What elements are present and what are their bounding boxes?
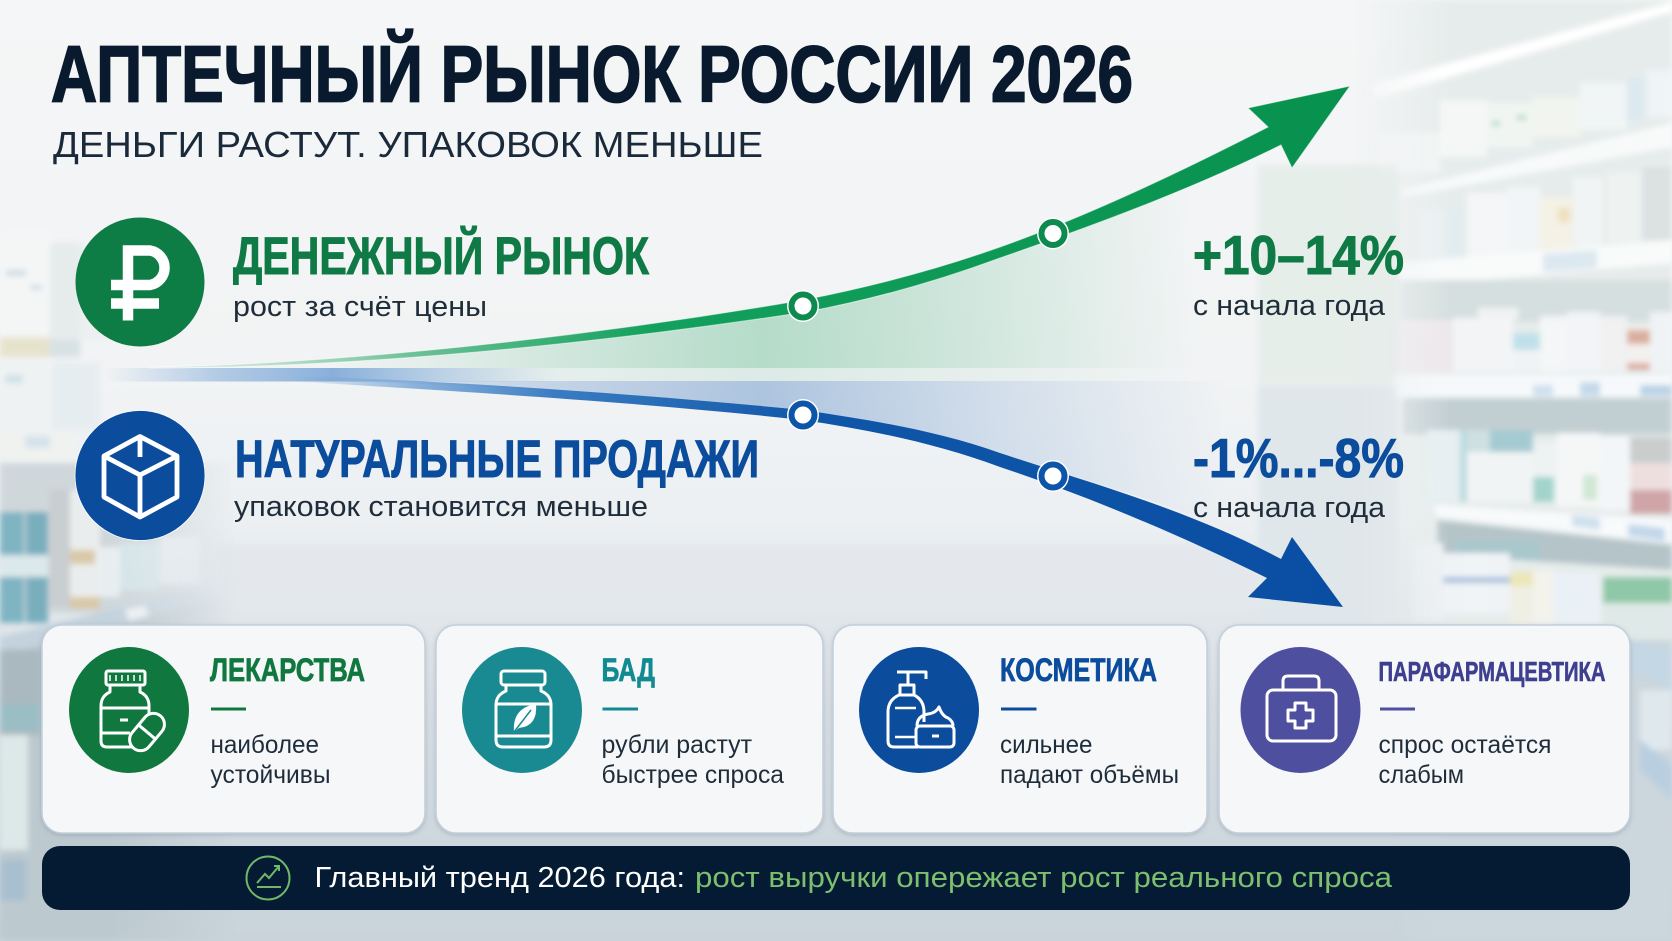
trend text: Главный тренд 2026 года:: [314, 862, 685, 894]
card text: падают объёмы: [1000, 761, 1179, 789]
heading: unit sales: НАТУРАЛЬНЫЕ ПРОДАЖИ: [235, 430, 759, 489]
icon: first aid case: [1240, 647, 1360, 773]
icon: rising chart: [246, 856, 290, 900]
title: АПТЕЧНЫЙ РЫНОК РОССИИ 2026: [51, 28, 1133, 118]
panel: parapharmaceuticals: [1219, 625, 1630, 833]
panel: dietary supplements: [436, 625, 823, 833]
card title: КОСМЕТИКА: [1000, 652, 1157, 688]
icon: box: [75, 410, 205, 540]
stat: money growth: +10–14%: [1193, 224, 1404, 286]
icon: pump bottle and cream jar: [859, 647, 979, 773]
icon: supplement jar with leaf: [462, 647, 582, 773]
blue area above decline curve: [300, 381, 1225, 531]
stat note: money growth: с начала года: [1193, 290, 1386, 322]
decline marker 2: [1037, 460, 1069, 492]
chart: diverging revenue and volume arrows: [105, 86, 1350, 607]
pale band at curve origin: [105, 368, 560, 382]
growth marker 2: [1037, 218, 1069, 250]
blue arrow: unit sales: [290, 376, 1343, 607]
callout: main trend bar: [42, 846, 1630, 910]
icon: medicine bottle and pill: [69, 647, 189, 773]
card text: сильнее: [1000, 731, 1092, 759]
subtitle: ДЕНЬГИ РАСТУТ. УПАКОВОК МЕНЬШЕ: [53, 124, 763, 165]
card text: наиболее: [210, 731, 319, 759]
card title: ЛЕКАРСТВА: [210, 652, 365, 688]
card text: быстрее спроса: [602, 761, 784, 789]
heading: money market: ДЕНЕЖНЫЙ РЫНОК: [233, 227, 650, 286]
card text: рубли растут: [602, 731, 753, 759]
stat note: unit decline: с начала года: [1193, 492, 1386, 524]
card text: спрос остаётся: [1378, 731, 1552, 759]
pale band between areas: [330, 368, 1195, 381]
icon: ruble: [76, 218, 204, 346]
growth marker 1: [787, 290, 819, 322]
decline marker 1: [787, 399, 819, 431]
green area under growth curve: [330, 165, 1195, 368]
panel: medicines: [42, 625, 425, 833]
card text: слабым: [1378, 761, 1464, 789]
trend text: рост выручки опережает рост реального спроса: [695, 862, 1393, 894]
stat: unit decline: -1%...-8%: [1193, 427, 1404, 489]
money market note: рост за счёт цены: [233, 291, 487, 323]
card title: БАД: [602, 652, 655, 688]
panel: cosmetics: [833, 625, 1207, 833]
card text: устойчивы: [210, 761, 330, 789]
green arrow: money market: [150, 86, 1350, 368]
unit sales note: упаковок становится меньше: [234, 491, 648, 523]
